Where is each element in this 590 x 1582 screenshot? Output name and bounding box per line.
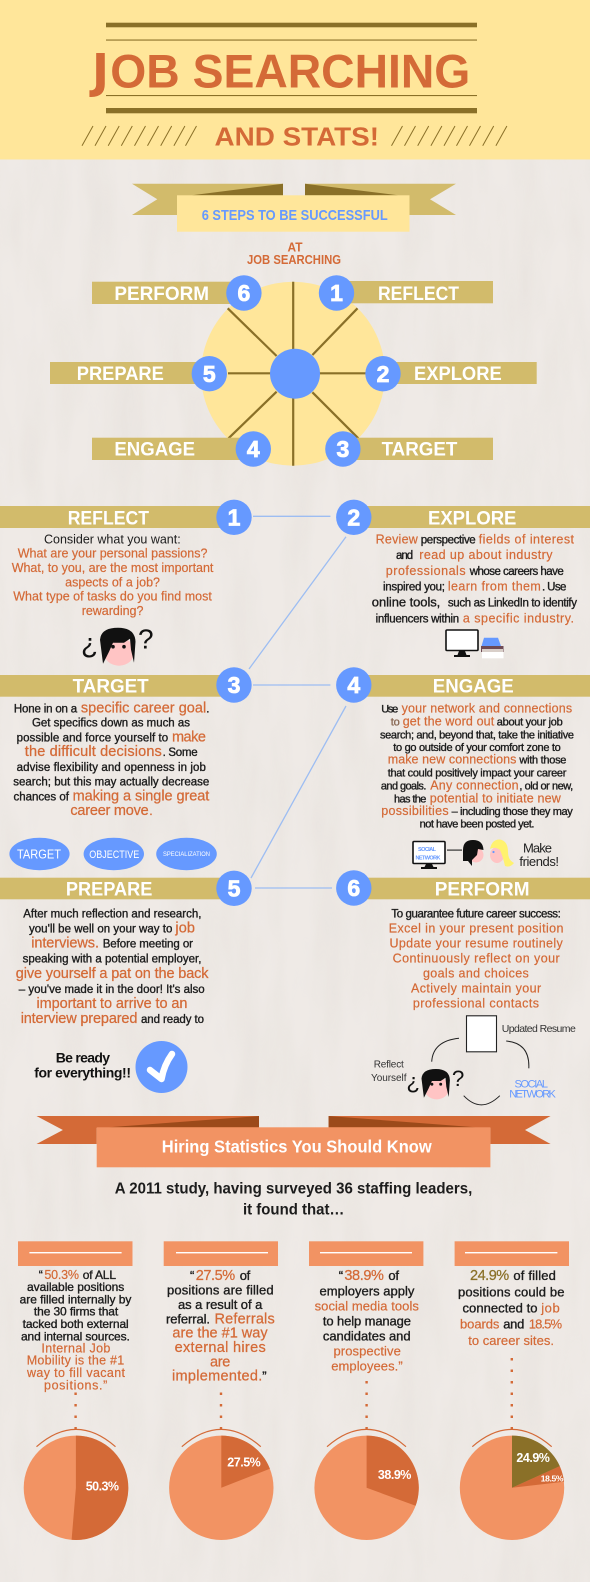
icon: thinking face: ? xyxy=(138,624,154,655)
text: engage: not have been posted yet. xyxy=(420,819,534,831)
pie chart 1: 50.3% xyxy=(86,1480,119,1494)
text: engage: get the word out xyxy=(403,714,495,728)
section header: explore: 2 xyxy=(347,504,360,530)
text: target: possible and force yourself to xyxy=(17,732,168,744)
text: target xyxy=(13,700,209,819)
text: target: make xyxy=(172,729,206,745)
text: engage: to xyxy=(391,716,400,728)
text: engage: search; and, beyond that, take the initiative xyxy=(380,729,574,741)
text: engage xyxy=(380,702,574,831)
step label: reflect: REFLECT xyxy=(378,283,459,305)
stat text 1 xyxy=(20,1268,131,1392)
step label: target: 3 xyxy=(337,436,349,462)
stat column 1 xyxy=(18,1241,132,1540)
text: explore: perspective xyxy=(421,534,476,546)
section header: target: TARGET xyxy=(73,676,149,698)
text: engage: has the xyxy=(394,793,426,805)
text: perform: Continuously reflect on your xyxy=(393,951,560,965)
text: engage: and goals. xyxy=(381,780,426,792)
text: reflect: rewarding? xyxy=(82,604,143,618)
arc 3 xyxy=(327,1429,406,1447)
text: engage: – including those they may xyxy=(452,806,573,818)
step label: explore: 2 xyxy=(377,361,389,387)
text: engage: about your job xyxy=(497,716,563,728)
text: prepare: speaking with a potential employer, xyxy=(23,954,201,966)
text: engage: to go outside of your comfort zone to xyxy=(393,742,561,754)
icon: social network monitor and friends xyxy=(413,839,559,869)
pie chart 1 xyxy=(24,1436,128,1540)
text: prepare: and ready to xyxy=(141,1014,204,1026)
text: engage: Use xyxy=(381,704,398,716)
stat text 2: are xyxy=(210,1354,230,1370)
pie chart 2: 27.5% xyxy=(227,1456,261,1470)
pie chart 4: 18.5% xyxy=(541,1474,564,1484)
stat text 4: job xyxy=(540,1300,560,1315)
pie chart 3 xyxy=(314,1436,419,1540)
section header: reflect xyxy=(0,500,252,535)
text: reflect: What are your personal passions? xyxy=(18,547,207,561)
stat text 2: Referrals xyxy=(214,1311,275,1327)
stat text 2: implemented. xyxy=(172,1369,262,1385)
tag: objective xyxy=(84,838,144,870)
stat text 3: social media tools xyxy=(315,1298,419,1313)
step label: target: TARGET xyxy=(382,438,457,460)
text: perform: Excel in your present position xyxy=(389,921,563,935)
section header: engage: 4 xyxy=(347,672,360,698)
subtitle: AND STATS! xyxy=(214,122,379,152)
connector lines between steps xyxy=(249,516,346,888)
text: explore: learn from them xyxy=(448,580,541,594)
text: perform: professional contacts xyxy=(413,996,539,1010)
dotted connector 4 xyxy=(511,1358,513,1430)
stat text 2 xyxy=(166,1268,275,1385)
text: prepare: give yourself a pat on the back xyxy=(16,966,209,982)
pie chart 3: 38.9% xyxy=(378,1468,411,1482)
dotted connector 1 xyxy=(74,1392,77,1430)
step label: perform: 6 xyxy=(238,280,250,306)
stat text 4: of filled xyxy=(513,1268,556,1283)
wheel subtitle: AT xyxy=(288,241,303,255)
stat text 1: available positions xyxy=(27,1280,124,1294)
section header: engage: ENGAGE xyxy=(433,676,514,698)
section header: perform xyxy=(336,870,590,906)
text: prepare: you'll be well on your way to xyxy=(29,924,172,936)
stat text 3: 38.9% xyxy=(344,1268,384,1284)
section header: perform: PERFORM xyxy=(435,879,530,901)
tag: specialization: SPECIALIZATION xyxy=(163,851,210,858)
stat text 1: “ xyxy=(39,1268,43,1282)
icon: thinking face small xyxy=(406,1066,464,1099)
arc 2 xyxy=(182,1429,261,1447)
title: J xyxy=(89,45,109,100)
stat text 3: of xyxy=(388,1268,399,1283)
text: prepare: important to arrive to an xyxy=(36,996,187,1012)
stat text 4: and xyxy=(503,1317,524,1332)
tag: specialization xyxy=(156,838,217,870)
tag: objective: OBJECTIVE xyxy=(89,849,139,861)
section header: prepare xyxy=(0,871,252,906)
tag: target xyxy=(9,838,70,870)
text: explore: influencers within xyxy=(376,613,459,625)
text: explore: online tools, xyxy=(372,594,440,609)
stat text 3: to help manage xyxy=(323,1313,411,1328)
text: prepare: Before meeting or xyxy=(103,939,193,951)
pie chart 4 xyxy=(460,1436,564,1540)
text: perform: Actively maintain your xyxy=(411,981,541,995)
text: explore: and xyxy=(396,550,413,562)
stat header bar 2 xyxy=(164,1241,278,1266)
stat text 3: candidates and xyxy=(323,1328,411,1343)
stat column 3 xyxy=(309,1241,423,1540)
text: prepare: interviews. xyxy=(31,936,99,952)
pie chart 2 xyxy=(169,1436,274,1540)
text: target: chances of xyxy=(14,792,70,804)
stat text 2: “ xyxy=(190,1268,194,1283)
text: explore: . Use xyxy=(542,582,566,594)
wheel subtitle xyxy=(247,241,341,267)
text: engage: , old or new, xyxy=(519,780,573,792)
section header: prepare: 5 xyxy=(228,876,241,902)
text: engage: that could positively impact your career xyxy=(388,768,567,780)
text: engage: potential to initiate new xyxy=(430,791,562,805)
ribbon: hiring statistics xyxy=(36,1116,551,1167)
dotted connector 2 xyxy=(220,1392,222,1430)
stat text 2: of xyxy=(240,1268,251,1283)
text: prepare: After much reflection and research, xyxy=(23,908,201,920)
stat text 4: 18.5% xyxy=(529,1317,562,1332)
stat column 4 xyxy=(455,1241,569,1540)
step label: prepare: PREPARE xyxy=(77,363,164,385)
step label: explore: EXPLORE xyxy=(414,363,502,385)
icon: social network monitor and friends: SOCIAL xyxy=(418,847,437,853)
arc 4 xyxy=(472,1429,552,1447)
step label: perform xyxy=(92,275,262,311)
text: target: Hone in on a xyxy=(14,703,78,715)
icon: thinking face: ¿ xyxy=(81,628,98,659)
stat text 4: to career sites. xyxy=(468,1333,554,1348)
icon: social network monitor and friends: friends! xyxy=(519,854,559,869)
stat header bar 4 xyxy=(455,1241,569,1266)
title: OB SEARCHING xyxy=(110,45,470,98)
section header: engage xyxy=(336,667,590,703)
icon: thinking face small: ? xyxy=(452,1066,464,1091)
text: reflect xyxy=(12,532,214,618)
text: perform xyxy=(389,908,563,1010)
header banner xyxy=(0,0,590,160)
stat text 3: employers apply xyxy=(320,1283,415,1298)
text: target: making a single great xyxy=(73,789,209,805)
arc 1 xyxy=(36,1429,116,1447)
text: engage: Any connection xyxy=(430,778,519,792)
stat text 2: referral. xyxy=(166,1311,210,1326)
text: prepare: job xyxy=(174,921,195,937)
text: reflect: Consider what you want: xyxy=(44,532,181,546)
section header: explore: EXPLORE xyxy=(428,507,516,529)
stat text 4 xyxy=(458,1268,564,1348)
ribbon: 6 steps: 6 STEPS TO BE SUCCESSFUL xyxy=(202,207,388,224)
stat text 2: 27.5% xyxy=(196,1268,235,1284)
text: engage: possibilities xyxy=(381,804,449,818)
text: engage: make new connections xyxy=(388,752,516,766)
text: explore xyxy=(372,532,577,625)
icon: thinking face xyxy=(81,624,154,666)
stat text 3: employees.” xyxy=(331,1359,403,1374)
stat text 1: Internal Job xyxy=(41,1342,110,1356)
text: reflect: What, to you, are the most important xyxy=(12,561,214,575)
diagram: resume cycle: Yourself xyxy=(371,1073,407,1084)
text: target: search; but this may actually decrease xyxy=(13,777,209,789)
stat header bar 1 xyxy=(18,1241,132,1266)
stat text 2: as a result of a xyxy=(178,1297,263,1312)
wheel diagram xyxy=(201,282,385,466)
diagram: resume cycle: NETWORK xyxy=(509,1089,557,1101)
callout: be ready: for everything!! xyxy=(34,1064,131,1080)
text: target: . Some xyxy=(163,747,198,759)
stat text 1: way to fill vacant xyxy=(26,1366,126,1380)
section header: perform: 6 xyxy=(347,875,360,901)
step label: perform: PERFORM xyxy=(114,283,209,305)
stat text 1: of ALL xyxy=(83,1268,116,1282)
text: explore: a specific industry. xyxy=(463,611,574,625)
text: reflect: aspects of a job? xyxy=(65,575,160,589)
section header: explore xyxy=(336,500,590,535)
step label: target xyxy=(325,431,493,467)
step label: engage: 4 xyxy=(247,436,260,462)
stat text 4: positions could be xyxy=(458,1284,564,1299)
step label: prepare xyxy=(50,356,227,391)
text: target: career move xyxy=(70,803,149,819)
stat text 1: are filled internally by xyxy=(20,1292,131,1306)
stat text 3: “ xyxy=(339,1268,343,1283)
stat text 1: positions.” xyxy=(44,1378,107,1392)
step label: engage: ENGAGE xyxy=(114,438,195,460)
text: target: . xyxy=(149,806,153,818)
diagram: resume cycle: Reflect xyxy=(374,1059,404,1070)
diagram: resume cycle xyxy=(371,1016,576,1105)
callout: be ready xyxy=(34,1041,188,1093)
step label: prepare: 5 xyxy=(203,361,216,387)
text: engage: your network and connections xyxy=(402,702,572,716)
stat text 2: ” xyxy=(262,1369,267,1384)
text: prepare xyxy=(16,908,209,1027)
ribbon: hiring statistics: Hiring Statistics You Should Know xyxy=(162,1137,432,1157)
text: target: Get specifics down as much as xyxy=(32,718,190,730)
text: target: specific career goal xyxy=(81,700,206,716)
step label: reflect: 1 xyxy=(330,280,343,306)
text: explore: professionals xyxy=(386,564,466,578)
stat text 1: tacked both external xyxy=(23,1317,129,1331)
stat text 1: 50.3% xyxy=(44,1268,79,1282)
stat text 3: prospective xyxy=(334,1344,401,1359)
stat column 2 xyxy=(164,1241,278,1540)
step label: reflect xyxy=(319,275,493,311)
stat text 4: connected to xyxy=(462,1300,538,1315)
text: perform: To guarantee future career success: xyxy=(391,908,561,920)
dotted connector 3 xyxy=(365,1381,368,1430)
text: target: the difficult decisions xyxy=(25,744,162,760)
right slashes xyxy=(392,126,507,146)
text: perform: goals and choices xyxy=(423,966,529,980)
section header: reflect: REFLECT xyxy=(68,507,149,529)
stat text 3 xyxy=(315,1268,419,1374)
text: explore: read up about industry xyxy=(419,548,553,562)
ribbon: 6 steps xyxy=(132,184,456,232)
section header: target: 3 xyxy=(228,672,240,698)
step label: engage xyxy=(92,431,271,467)
text: engage: with those xyxy=(518,754,566,766)
tag: target: TARGET xyxy=(17,846,61,862)
stat text 2: external hires xyxy=(175,1340,266,1356)
stat text 4: boards xyxy=(460,1317,500,1332)
text: explore: such as LinkedIn to identify xyxy=(448,597,577,609)
icon: social network monitor and friends: Make xyxy=(523,840,552,855)
section header: target xyxy=(0,667,252,703)
text: explore: fields of interest xyxy=(479,532,575,546)
intro text: A 2011 study, having surveyed 36 staffing leaders, xyxy=(115,1180,472,1197)
pie chart 4: 24.9% xyxy=(516,1451,550,1465)
icon: monitor and books xyxy=(446,630,504,658)
diagram: resume cycle: SOCIAL xyxy=(514,1078,548,1090)
text: prepare: – you've made it in the door! It's also xyxy=(19,984,205,996)
icon: social network monitor and friends: NETWORK xyxy=(416,856,441,862)
text: explore: inspired you; xyxy=(383,582,445,594)
text: reflect: What type of tasks do you find most xyxy=(13,590,212,604)
stat text 2: are the #1 way xyxy=(172,1326,268,1342)
text: perform: Update your resume routinely xyxy=(390,936,563,950)
stat text 1: and internal sources. xyxy=(21,1329,130,1343)
intro text: it found that… xyxy=(243,1201,344,1218)
intro text xyxy=(115,1180,472,1218)
section header: reflect: 1 xyxy=(228,504,241,530)
stat text 1: Mobility is the #1 xyxy=(27,1354,124,1368)
stat text 1: the 30 firms that xyxy=(34,1305,119,1319)
stat text 4: 24.9% xyxy=(470,1268,509,1284)
wheel subtitle: JOB SEARCHING xyxy=(247,253,341,267)
text: target: advise flexibility and openness in job xyxy=(17,762,206,774)
stat header bar 3 xyxy=(309,1241,423,1266)
text: explore: whose careers have xyxy=(469,566,564,578)
step label: explore xyxy=(365,356,537,391)
stat text 2: positions are filled xyxy=(167,1283,274,1298)
icon: thinking face small: ¿ xyxy=(406,1069,420,1094)
diagram: resume cycle: Updated Resume xyxy=(502,1023,576,1035)
section header: prepare: PREPARE xyxy=(66,879,152,901)
text: explore: Review xyxy=(376,532,419,546)
text: prepare: interview prepared xyxy=(21,1011,137,1027)
callout: be ready: Be ready xyxy=(56,1049,110,1065)
text: target: . xyxy=(206,703,209,715)
left slashes xyxy=(82,126,196,146)
